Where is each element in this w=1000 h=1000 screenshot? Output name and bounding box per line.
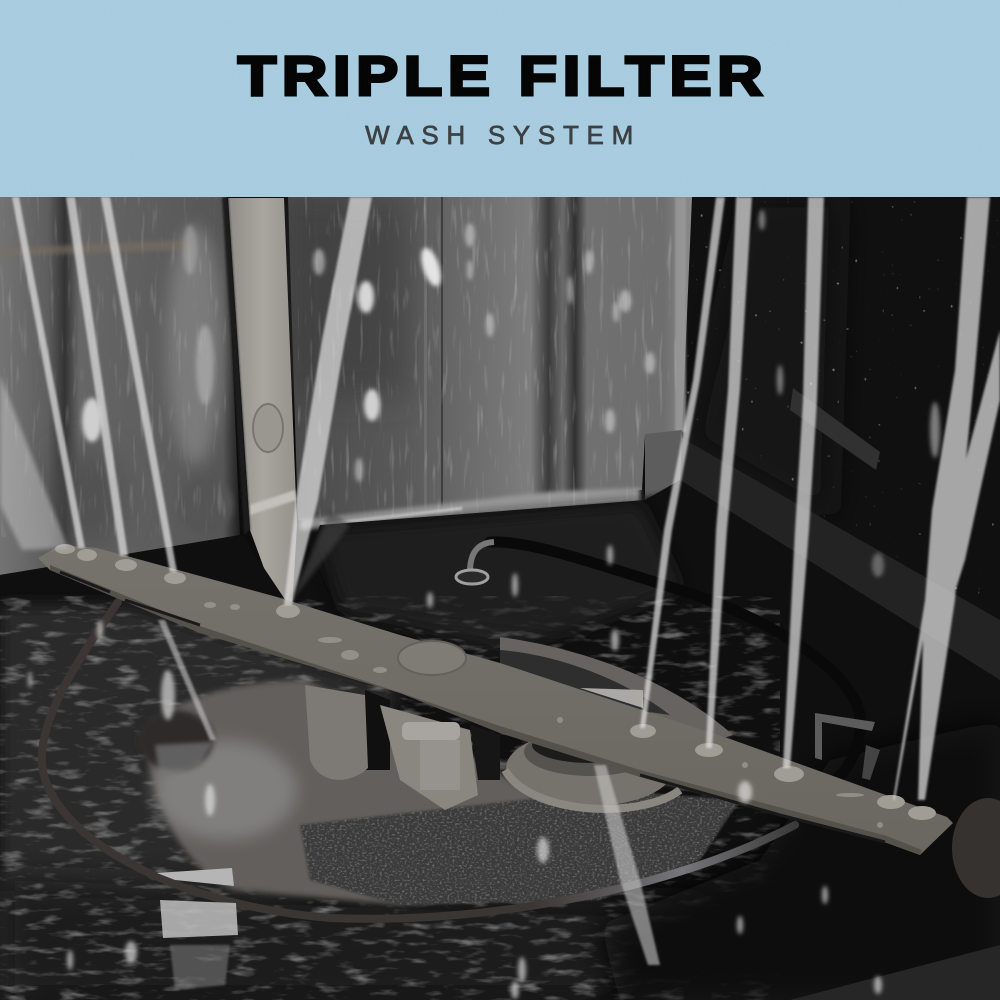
water ripples on floor	[0, 596, 780, 1000]
title: TRIPLE FILTER	[238, 44, 768, 107]
subtitle: WASH SYSTEM	[365, 120, 641, 150]
wall spray streaks	[0, 197, 678, 537]
mesh filter	[300, 792, 737, 905]
pillar	[222, 197, 297, 610]
dark floor fade on right	[310, 505, 1000, 1000]
pump housings	[305, 685, 500, 810]
clips	[157, 713, 880, 990]
side spray fan	[0, 375, 68, 550]
droplets	[28, 210, 940, 999]
water falling below the arm	[158, 620, 660, 965]
wall corner post	[642, 430, 740, 540]
header banner	[0, 0, 1000, 197]
water jets	[12, 197, 1000, 800]
inlet fitting	[456, 542, 494, 584]
central spray fan	[290, 510, 350, 603]
arm water beads	[204, 602, 883, 828]
spray arm	[38, 544, 953, 855]
arm clips	[60, 572, 885, 842]
tub floor	[0, 480, 1000, 1000]
right wall	[650, 197, 1000, 647]
outer tube	[42, 542, 860, 919]
arm nozzles	[55, 544, 936, 820]
left wall	[0, 197, 240, 575]
back wall	[288, 197, 692, 530]
filter basin water	[137, 680, 590, 905]
rock shaped object	[952, 798, 1000, 898]
triple filter assembly	[500, 637, 733, 809]
right wall ridge	[680, 388, 1000, 680]
